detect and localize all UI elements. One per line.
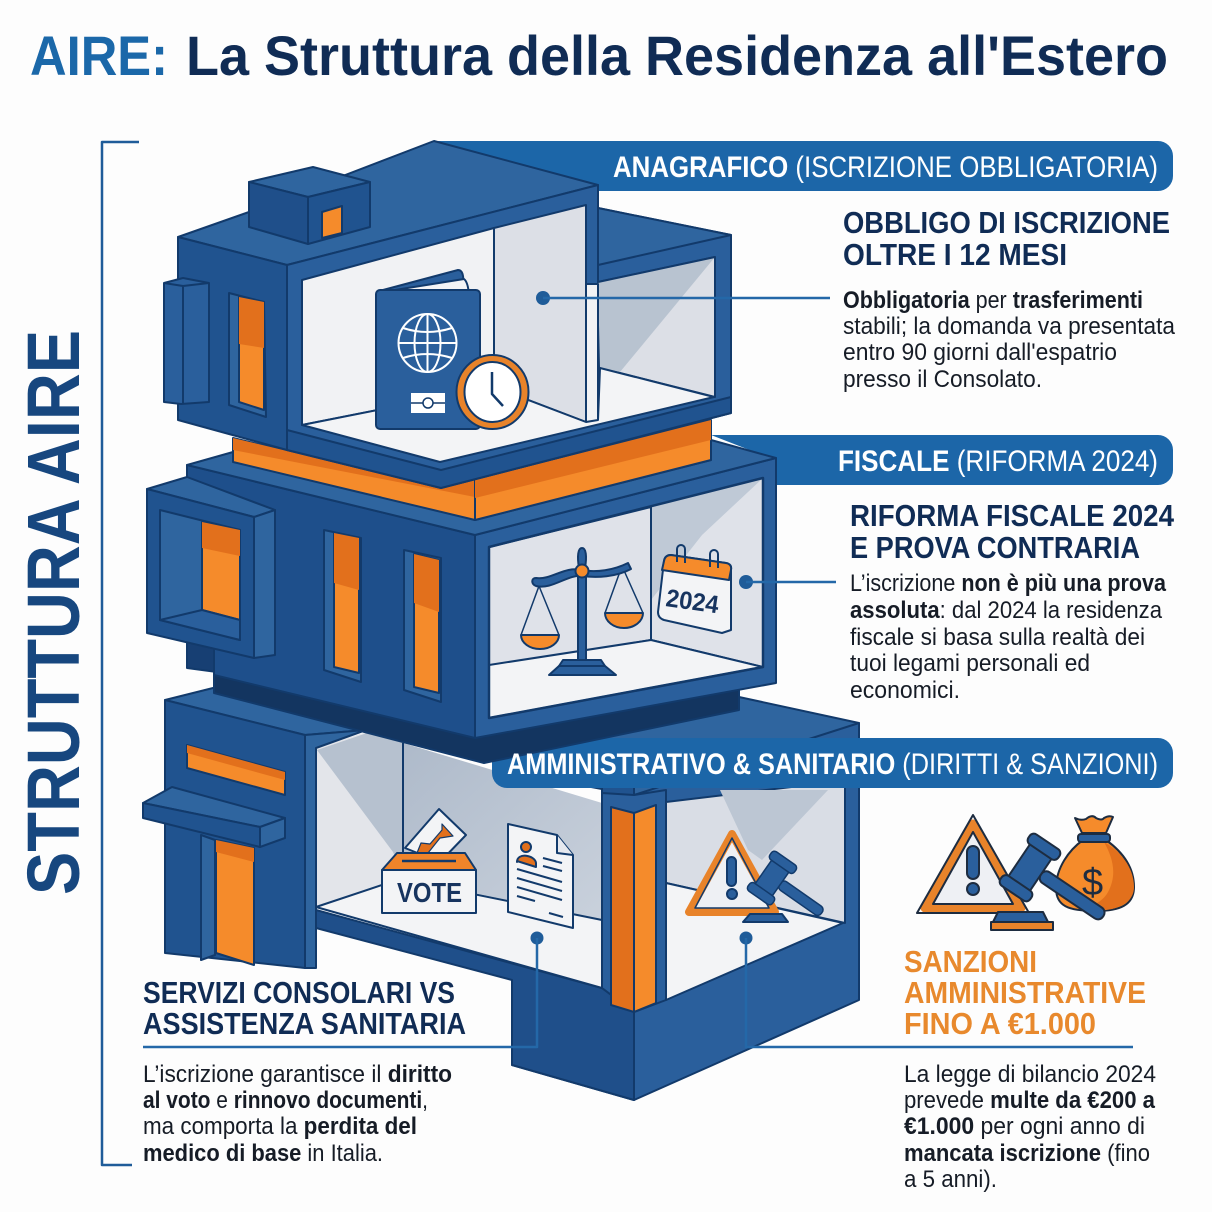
connector: fiscale — [739, 575, 836, 589]
left wall — [178, 237, 287, 450]
left wall — [187, 465, 475, 738]
icon: warning, gavel and money bag — [917, 815, 1134, 942]
heading: obbligo — [843, 205, 1170, 272]
heading: riforma — [850, 498, 1175, 565]
roof box — [249, 167, 370, 197]
side label: Struttura AIRE: STRUTTURA AIRE — [12, 330, 95, 895]
text: riforma: economici. — [850, 677, 960, 704]
pill: fiscale background — [711, 435, 1173, 485]
left room walls — [316, 720, 404, 907]
dark underside — [214, 670, 739, 763]
heading: sanzioni: FINO A €1.000 — [904, 1006, 1096, 1041]
heading: obbligo: OBBLIGO DI ISCRIZIONE — [843, 205, 1170, 240]
text: servizi: ma comporta la perdita del — [143, 1113, 417, 1140]
money bag — [1075, 816, 1113, 833]
roof — [178, 141, 598, 265]
text: servizi: L’iscrizione garantisce il diritto — [143, 1061, 452, 1088]
text: riforma: tuoi legami personali ed — [850, 650, 1090, 677]
orange band under top block — [233, 420, 711, 520]
text: riforma: L’iscrizione non è più una prova — [850, 570, 1167, 597]
title: La Struttura della Residenza all'Estero — [186, 24, 1168, 87]
text: obbligo: Obbligatoria per trasferimenti — [843, 287, 1143, 314]
text: sanzioni: La legge di bilancio 2024 — [904, 1061, 1156, 1088]
right room — [666, 786, 845, 923]
icon: clock — [456, 355, 528, 429]
center pillar — [602, 790, 666, 1012]
connector: anagrafico — [536, 291, 830, 305]
gavel — [998, 832, 1120, 942]
text: sanzioni — [904, 1061, 1156, 1193]
room — [302, 228, 494, 425]
pill label: fiscale: FISCALE (RIFORMA 2024) — [838, 445, 1158, 478]
icon: calendar 2024: 2024 — [664, 584, 721, 619]
front frame — [287, 185, 731, 488]
icon: scales — [521, 548, 643, 675]
text: sanzioni: mancata iscrizione (fino — [904, 1140, 1150, 1167]
door — [201, 835, 215, 960]
tower — [165, 688, 366, 735]
pill: amministrativo — [492, 738, 1173, 788]
building: top block — [164, 141, 731, 488]
pill label: anagrafico: ANAGRAFICO (ISCRIZIONE OBBLIGATORIA) — [613, 151, 1158, 184]
icon: ballot box — [382, 809, 476, 913]
text: servizi: al voto e rinnovo documenti, — [143, 1087, 428, 1114]
heading: servizi: SERVIZI CONSOLARI VS — [143, 975, 455, 1010]
icon: passport — [376, 270, 480, 429]
icon: calendar 2024 — [658, 545, 731, 633]
building: bottom block — [143, 688, 859, 1100]
connector: servizi — [143, 932, 544, 1047]
icon: document — [508, 824, 573, 928]
connector: sanzioni — [740, 932, 1133, 1047]
heading: sanzioni: SANZIONI — [904, 944, 1037, 979]
left wing — [147, 477, 275, 517]
icon: ballot box: VOTE — [397, 877, 462, 908]
tower stripe — [187, 745, 285, 795]
text: obbligo: stabili; la domanda va presentata — [843, 313, 1176, 340]
heading: servizi: ASSISTENZA SANITARIA — [143, 1006, 466, 1041]
warning triangle — [925, 824, 1021, 908]
slab — [287, 397, 731, 488]
text: riforma: assoluta: dal 2024 la residenza — [850, 597, 1163, 624]
pill label: amministrativo: AMMINISTRATIVO & SANITARIO (DIRITTI & SANZIONI) — [507, 748, 1158, 781]
text: sanzioni: a 5 anni). — [904, 1166, 997, 1193]
heading: obbligo: OLTRE I 12 MESI — [843, 237, 1067, 272]
pill: anagrafico background — [434, 141, 1173, 191]
text: servizi: medico di base in Italia. — [143, 1140, 383, 1167]
heading: riforma: E PROVA CONTRARIA — [850, 530, 1140, 565]
room walls — [489, 507, 651, 667]
text: riforma: fiscale si basa sulla realtà dei — [850, 624, 1145, 651]
heading: sanzioni: AMMINISTRATIVE — [904, 975, 1146, 1010]
bottom block right face — [634, 723, 859, 1100]
heading: sanzioni — [904, 944, 1146, 1041]
text: obbligo: presso il Consolato. — [843, 366, 1042, 393]
icon: warning and gavel in the room — [689, 834, 836, 933]
bottom block roof — [500, 697, 859, 795]
text: sanzioni: €1.000 per ogni anno di — [904, 1113, 1145, 1140]
heading: riforma: RIFORMA FISCALE 2024 — [850, 498, 1175, 533]
heading: servizi — [143, 975, 466, 1041]
text: sanzioni: prevede multe da €200 a — [904, 1087, 1156, 1114]
icon: warning, gavel and money bag: $ — [1082, 862, 1103, 904]
title: AIRE: — [30, 24, 168, 87]
front frame — [475, 458, 776, 738]
text: servizi — [143, 1061, 452, 1167]
text: riforma — [850, 570, 1167, 704]
awning — [143, 787, 285, 827]
bracket — [102, 142, 139, 1165]
building: middle block — [147, 440, 776, 763]
left bay — [164, 278, 209, 404]
window 2 — [404, 550, 441, 702]
left window — [229, 293, 266, 417]
window 1 — [324, 530, 361, 682]
text: obbligo: entro 90 giorni dall'espatrio — [843, 339, 1117, 366]
text: obbligo — [843, 287, 1176, 393]
